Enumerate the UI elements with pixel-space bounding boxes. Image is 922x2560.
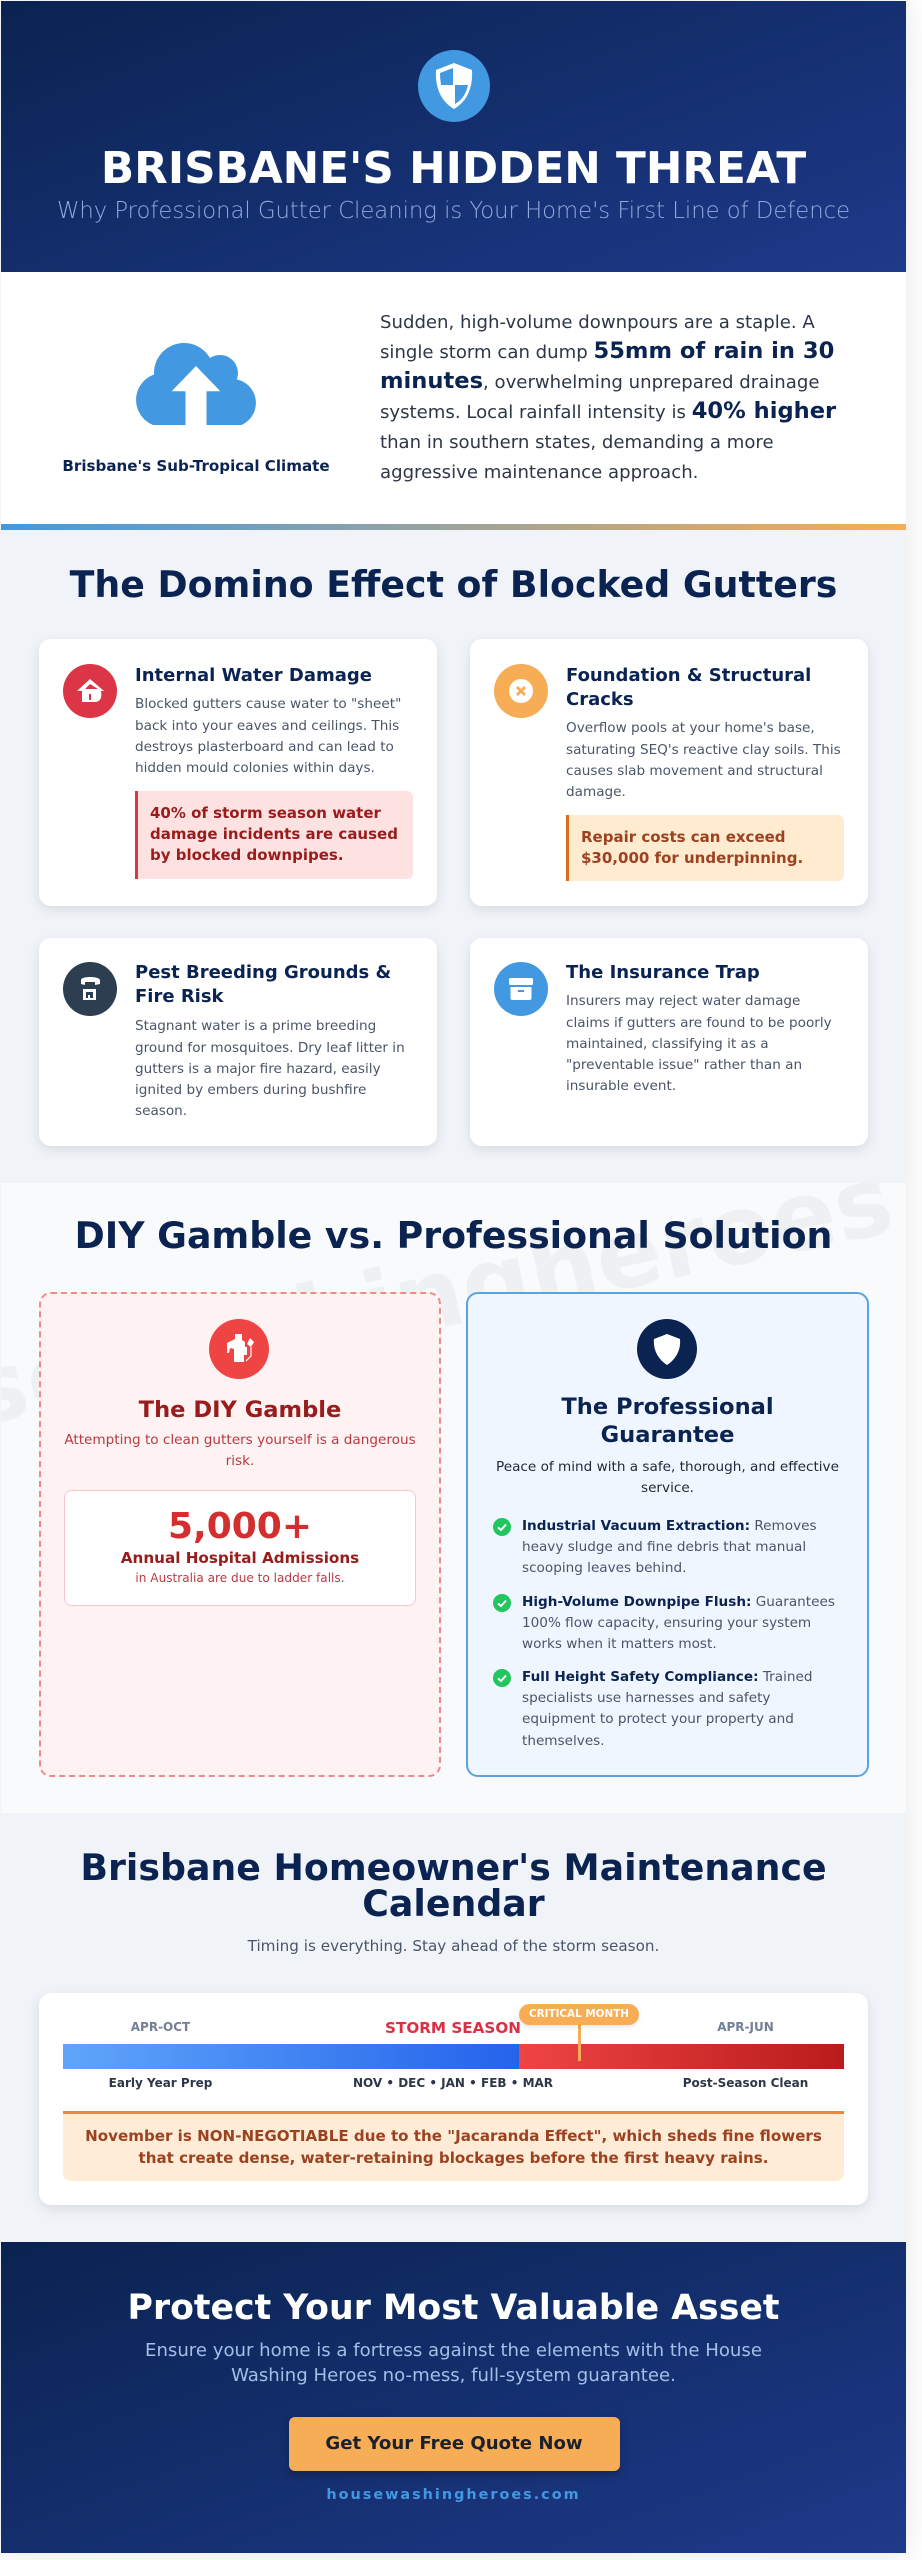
marker badge: CRITICAL MONTH: [529, 2008, 629, 2020]
calendar subtitle: Timing is everything. Stay ahead of the storm season.: [248, 1937, 659, 1955]
pro text: service.: [641, 1480, 694, 1496]
checklist item: [493, 1594, 835, 1652]
item text: High-Volume Downpipe Flush: Guarantees: [522, 1594, 835, 1610]
label: APR-OCT: APR-OCT: [131, 2020, 190, 2034]
icon: shield: [418, 50, 490, 122]
critical month marker: [518, 2004, 640, 2061]
item text: equipment to protect your property and: [522, 1711, 794, 1727]
card text: destroys plasterboard and can lead to: [135, 739, 394, 755]
climate paragraph: [380, 312, 836, 483]
title: BRISBANE'S HIDDEN THREAT: [101, 143, 806, 194]
stat callout: [566, 815, 844, 881]
card title: Foundation & Structural: [566, 665, 811, 686]
pro title: The Professional: [561, 1394, 774, 1420]
item text: [522, 1669, 812, 1749]
card text: ignited by embers during bushfire: [135, 1082, 366, 1098]
climate paragraph: aggressive maintenance approach.: [380, 462, 698, 483]
timeline bar: [63, 2044, 844, 2069]
item text: scooping leaves behind.: [522, 1560, 686, 1576]
stat callout: damage incidents are caused: [150, 825, 398, 843]
subtitle: Why Professional Gutter Cleaning is Your Home's First Line of Defence: [57, 198, 850, 224]
card text: Stagnant water is a prime breeding: [135, 1018, 376, 1034]
card text: saturating SEQ's reactive clay soils. This: [566, 742, 841, 758]
item text: [522, 1518, 817, 1576]
item text: specialists use harnesses and safety: [522, 1690, 770, 1706]
stat label: Annual Hospital Admissions: [121, 1549, 359, 1567]
climate paragraph: single storm can dump 55mm of rain in 30: [380, 338, 834, 364]
stat callout: 40% of storm season water: [150, 804, 381, 822]
card title: [566, 665, 811, 710]
footer text: Washing Heroes no-mess, full-system guarantee.: [231, 2365, 676, 2386]
item text: works when it matters most.: [522, 1636, 717, 1652]
segment: pre-season: [63, 2044, 519, 2069]
climate paragraph: systems. Local rainfall intensity is 40% higher: [380, 398, 836, 424]
panel: climate intro: [1, 272, 906, 530]
label: storm season: STORM SEASON: [385, 2019, 521, 2037]
card text: "preventable issue" rather than an: [566, 1057, 802, 1073]
card title: Fire Risk: [135, 986, 224, 1007]
panel: domino effect: [1, 530, 906, 1183]
panel: footer call to action: [1, 2242, 906, 2553]
card text: claims if gutters are found to be poorly: [566, 1015, 832, 1031]
card: internal water damage: [39, 639, 437, 906]
DIY title: The DIY Gamble: [139, 1397, 341, 1423]
label: APR-JUN: APR-JUN: [717, 2020, 774, 2034]
climate paragraph: Sudden, high-volume downpours are a staple. A: [380, 312, 815, 333]
card text: Blocked gutters cause water to "sheet": [135, 696, 401, 712]
marker badge: [519, 2004, 639, 2025]
checklist item: [493, 1669, 812, 1749]
card text: [135, 696, 401, 776]
climate paragraph: minutes, overwhelming unprepared drainage: [380, 368, 819, 394]
card text: insurable event.: [566, 1078, 676, 1094]
stat note: in Australia are due to ladder falls.: [135, 1571, 345, 1585]
card text: Insurers may reject water damage: [566, 993, 800, 1009]
card: insurance trap: [470, 938, 868, 1146]
segment: storm season: [519, 2044, 844, 2069]
callout: November: November is NON-NEGOTIABLE due to the "Jacaranda Effect", which sheds fine flowers: [85, 2127, 822, 2145]
label: post-season clean: Post-Season Clean: [683, 2076, 808, 2090]
card: timeline: [39, 1993, 868, 2205]
icon: check: [493, 1669, 511, 1687]
card text: season.: [135, 1103, 187, 1119]
pro title: [561, 1394, 774, 1448]
card text: ground for mosquitoes. Dry leaf litter in: [135, 1040, 405, 1056]
heading: Calendar: [362, 1882, 545, 1925]
heading: Brisbane Homeowner's Maintenance: [80, 1846, 827, 1889]
callout: November: [63, 2111, 844, 2181]
checklist item: [493, 1518, 817, 1576]
button: Get Your Free Quote Now: [325, 2433, 583, 2454]
item text: [522, 1594, 835, 1652]
pro text: [496, 1459, 839, 1496]
label: months: NOV • DEC • JAN • FEB • MAR: [353, 2076, 553, 2090]
panel: DIY vs professional: [1, 1183, 906, 1813]
card title: Internal Water Damage: [135, 665, 372, 686]
label: early year prep: Early Year Prep: [109, 2076, 212, 2090]
icon: cracked circle: [494, 664, 548, 718]
card text: back into your eaves and ceilings. This: [135, 718, 399, 734]
card text: [135, 1018, 405, 1119]
item text: Industrial Vacuum Extraction: Removes: [522, 1518, 817, 1534]
panel: DIY gamble: [39, 1292, 441, 1777]
gradient divider: [1, 524, 906, 530]
heading: The Domino Effect of Blocked Gutters: [70, 563, 837, 606]
callout: November: that create dense, water-retaining blockages before the first heavy rains.: [138, 2148, 769, 2166]
card text: damage.: [566, 784, 626, 800]
icon: archive box: [494, 962, 548, 1016]
card: foundation cracks: [470, 639, 868, 906]
stat callout: [135, 791, 413, 879]
pro text: Peace of mind with a safe, thorough, and effective: [496, 1459, 839, 1475]
panel: maintenance calendar: [1, 1813, 906, 2242]
card title: [135, 962, 391, 1007]
icon: check: [493, 1518, 511, 1536]
stat callout: Repair costs can exceed: [581, 828, 786, 846]
item text: heavy sludge and fine debris that manual: [522, 1539, 806, 1555]
item text: 100% flow capacity, ensuring your system: [522, 1615, 811, 1631]
card: pest and fire: [39, 938, 437, 1146]
icon: mosquito fire: [63, 962, 117, 1016]
stat callout: $30,000 for underpinning.: [581, 849, 803, 867]
heading: DIY Gamble vs. Professional Solution: [75, 1214, 832, 1257]
icon: check: [493, 1594, 511, 1612]
climate paragraph: than in southern states, demanding a more: [380, 432, 774, 453]
item text: Full Height Safety Compliance: Trained: [522, 1669, 812, 1685]
button: [288, 2417, 620, 2471]
climate label: Brisbane's Sub-Tropical Climate: [62, 457, 330, 475]
DIY text: risk.: [226, 1453, 254, 1469]
big number: 5,000+: [168, 1506, 312, 1547]
card text: hidden mould colonies within days.: [135, 760, 375, 776]
card title: Cracks: [566, 689, 634, 710]
footer heading: Protect Your Most Valuable Asset: [128, 2288, 779, 2328]
card title: The Insurance Trap: [566, 962, 760, 983]
card text: maintained, classifying it as a: [566, 1036, 769, 1052]
panel: header: [1, 1, 906, 272]
item text: themselves.: [522, 1733, 605, 1749]
heading: [80, 1846, 827, 1925]
card text: [566, 993, 832, 1094]
marker stem: [578, 2024, 580, 2061]
card title: Pest Breeding Grounds &: [135, 962, 391, 983]
card text: gutters is a major fire hazard, easily: [135, 1061, 381, 1077]
DIY text: [64, 1432, 416, 1469]
panel: professional guarantee: [466, 1292, 869, 1777]
stat callout: by blocked downpipes.: [150, 846, 344, 864]
stat box: hospital admissions: [64, 1490, 416, 1606]
footer text: [145, 2340, 762, 2386]
icon: house damage: [63, 664, 117, 718]
card text: [566, 720, 841, 800]
website URL: housewashingheroes.com: [326, 2487, 581, 2503]
icon: ladder injury: [209, 1319, 269, 1379]
icon: shield: [636, 1319, 696, 1379]
footer text: Ensure your home is a fortress against the elements with the House: [145, 2340, 762, 2361]
pro title: Guarantee: [601, 1422, 734, 1448]
card text: causes slab movement and structural: [566, 763, 823, 779]
card text: Overflow pools at your home's base,: [566, 720, 815, 736]
DIY text: Attempting to clean gutters yourself is a dangerous: [64, 1432, 416, 1448]
icon: cloud upload: [136, 343, 256, 425]
